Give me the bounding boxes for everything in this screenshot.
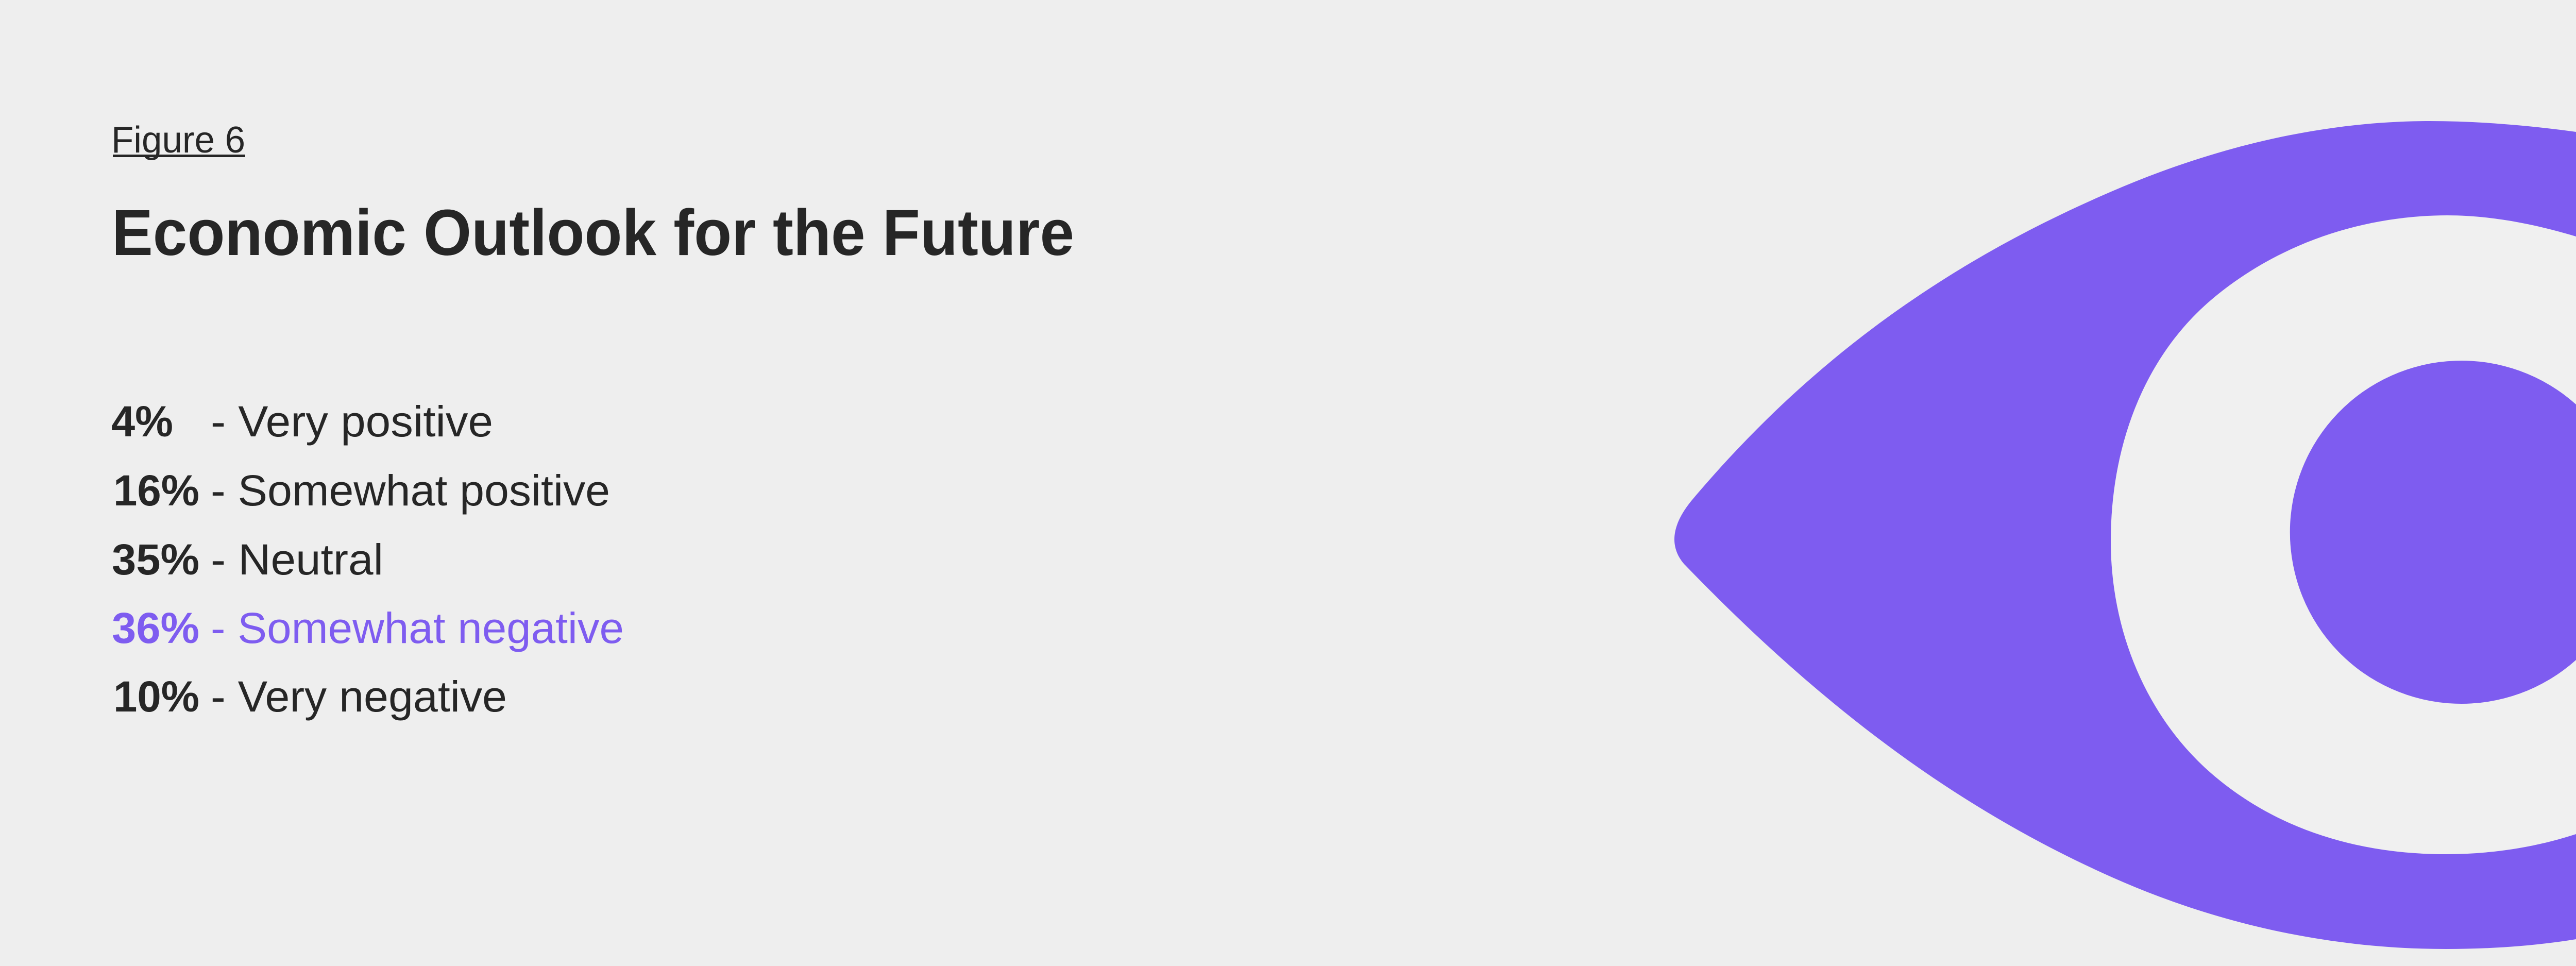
row: somewhat positive: - Somewhat positive xyxy=(211,466,610,515)
row: neutral: - Neutral xyxy=(211,535,383,584)
eye white xyxy=(2111,215,2576,854)
row: somewhat negative (highlighted): 36% xyxy=(112,604,199,652)
eye outer shape xyxy=(1674,121,2576,949)
row: neutral: 35% xyxy=(112,535,199,584)
row: neutral xyxy=(112,535,383,584)
icon: eye xyxy=(1674,121,2576,949)
results list xyxy=(111,397,624,721)
eye pupil xyxy=(2290,361,2576,704)
title: Economic Outlook for the Future xyxy=(112,196,1074,269)
row: very negative: 10% xyxy=(113,672,199,721)
row: very positive: 4% xyxy=(111,397,173,446)
row: somewhat negative (highlighted): - Somewhat negative xyxy=(211,604,624,652)
row: very positive: - Very positive xyxy=(211,397,493,446)
row: very negative: - Very negative xyxy=(211,672,507,721)
row: somewhat positive: 16% xyxy=(113,466,199,515)
figure label: Figure 6 xyxy=(111,120,245,161)
